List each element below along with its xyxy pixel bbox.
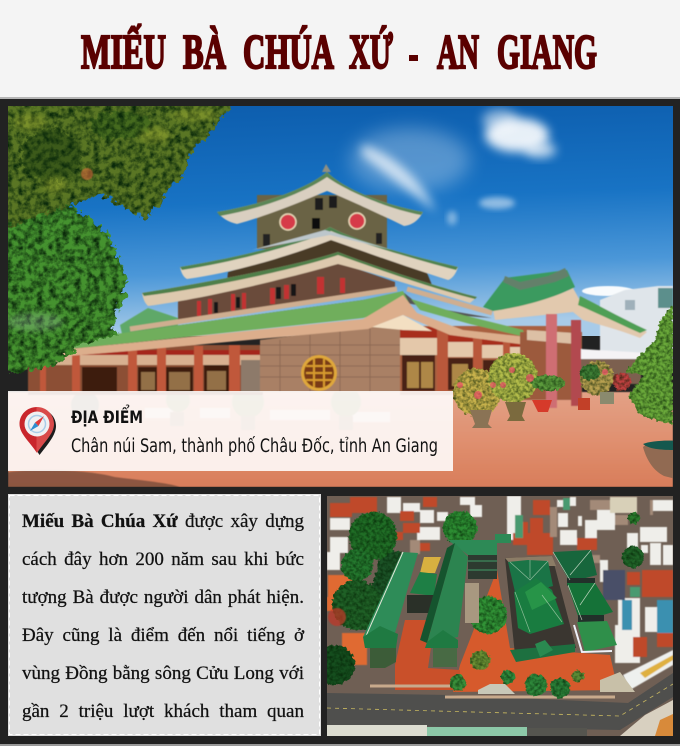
small distant roof left: [120, 308, 178, 334]
third roof: [142, 252, 477, 306]
title: BÀ: [183, 24, 226, 79]
orange courtyards: [395, 570, 635, 692]
top-tier red medallions: [280, 214, 296, 230]
middle long hall: [427, 543, 468, 643]
clouds: [350, 109, 634, 296]
faded benches and plants under label: [72, 393, 360, 418]
title: GIANG: [497, 24, 597, 79]
tier walls: [257, 195, 387, 249]
title: CHÚA: [243, 24, 334, 79]
right temple: [553, 550, 597, 578]
aerial photo of temple complex: [315, 496, 673, 736]
description text: Miếu Bà Chúa Xứ được xây dựng: [22, 511, 304, 532]
description text: vùng Đồng bằng sông Cửu Long với: [22, 663, 304, 684]
main temple: [505, 556, 576, 655]
description text: tượng Bà được người dân phát hiện.: [22, 587, 304, 608]
title banner background: [0, 0, 680, 97]
left trees: [0, 96, 232, 372]
title: AN: [437, 24, 479, 79]
flower pots: [470, 410, 492, 428]
description panel background: [8, 494, 321, 736]
left long hall: [363, 552, 418, 637]
top roof: [217, 172, 423, 226]
white balcony: [580, 348, 640, 360]
location label box: [8, 391, 453, 471]
title: XỨ: [349, 24, 393, 79]
right wing wall: [400, 326, 578, 395]
main green roof with gable: [20, 289, 527, 360]
background building right: [600, 286, 673, 372]
sky: [8, 106, 673, 336]
bonsai tree and pot at right edge: [626, 306, 673, 478]
bonsai and flower trees: [453, 353, 631, 428]
description text: Đây cũng là điểm đến nổi tiếng ở: [22, 625, 304, 646]
second roof: [180, 227, 458, 280]
stone wall with round window: [260, 322, 403, 392]
rear cross hall: [448, 540, 497, 555]
main photo: temple: [0, 96, 680, 487]
yellow roof and middle pavilion: [420, 557, 441, 573]
road and sidewalk: [327, 673, 673, 736]
description text: cách đây hơn 200 năm sau khi bức: [22, 549, 304, 570]
temple upper tiers: [142, 164, 477, 320]
title: MIẾU: [81, 24, 166, 79]
description text: [22, 511, 304, 722]
right pavilion: [483, 268, 647, 408]
surrounding houses: [327, 496, 673, 690]
title: [81, 24, 597, 79]
icon: compass location pin: [20, 407, 56, 455]
green temple halls: [363, 534, 617, 668]
location text: Chân núi Sam, thành phố Châu Đốc, tỉnh An Giang: [71, 436, 438, 457]
left lower wall of main hall: [28, 345, 263, 395]
courtyard gate: [478, 684, 515, 694]
pink pillars: [546, 314, 557, 408]
trees: [315, 511, 644, 698]
description text: gần 2 triệu lượt khách tham quan: [22, 701, 304, 722]
label heading: ĐỊA ĐIỂM: [71, 405, 143, 427]
plaza floor: [8, 392, 673, 487]
